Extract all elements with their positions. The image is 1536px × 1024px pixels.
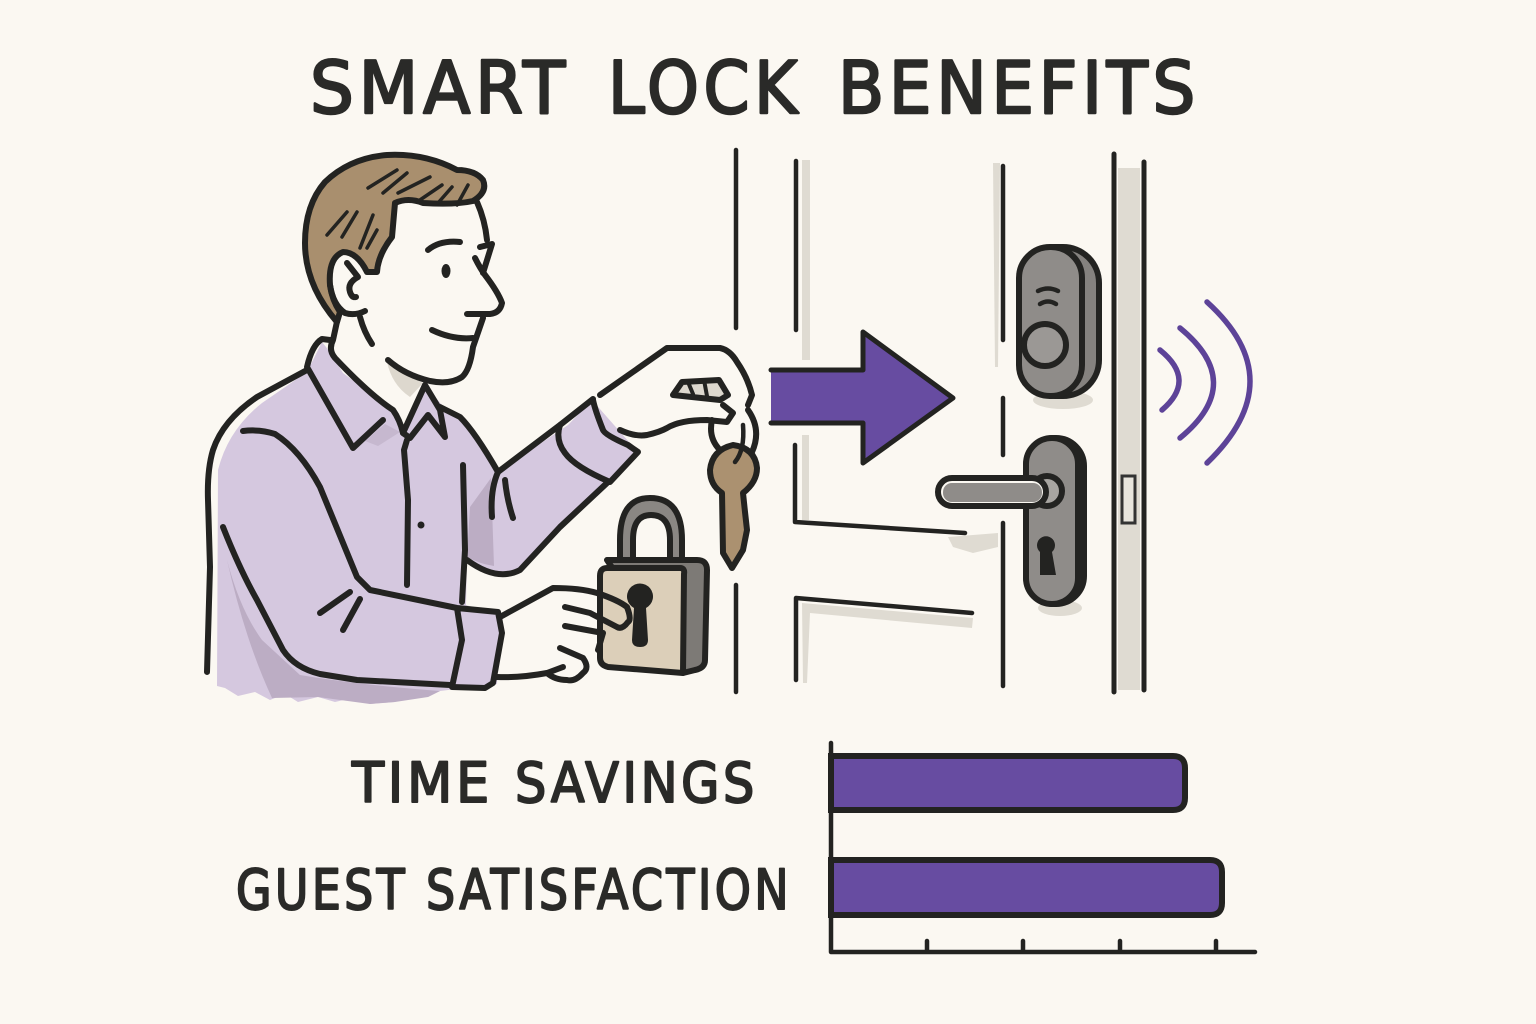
axes	[831, 743, 1255, 952]
head	[331, 202, 502, 433]
label: guest satisfaction: SATISFACTION	[426, 858, 792, 922]
neck shadow	[387, 362, 423, 397]
label: guest satisfaction	[236, 858, 792, 922]
key	[710, 410, 757, 568]
ear	[330, 263, 365, 314]
title	[310, 46, 1200, 130]
label: guest satisfaction: GUEST	[236, 858, 408, 922]
padlock	[600, 498, 707, 673]
hand holding key	[600, 348, 752, 435]
label: time savings: TIME	[351, 751, 493, 815]
door frame	[736, 150, 1144, 692]
label: time savings	[351, 751, 758, 815]
bar: time savings	[831, 756, 1185, 810]
arrow	[771, 330, 953, 463]
door handle	[938, 438, 1084, 604]
title: LOCK	[608, 46, 802, 130]
hair	[305, 155, 484, 322]
bar chart	[236, 743, 1255, 952]
hair strands	[327, 170, 468, 248]
illustration: man with key and padlock	[207, 155, 757, 704]
label: time savings: SAVINGS	[515, 751, 758, 815]
button	[418, 522, 424, 528]
wireless signal	[1160, 302, 1250, 463]
bar: guest satisfaction	[831, 860, 1222, 915]
title: BENEFITS	[838, 46, 1200, 130]
shirt fill	[217, 342, 636, 704]
shirt outline	[207, 339, 638, 688]
smart lock	[1019, 247, 1099, 396]
lower hand	[497, 588, 630, 680]
title: SMART	[310, 46, 570, 130]
door latch	[1122, 476, 1135, 523]
shirt shadows	[227, 424, 494, 704]
door shadows	[802, 160, 1140, 690]
